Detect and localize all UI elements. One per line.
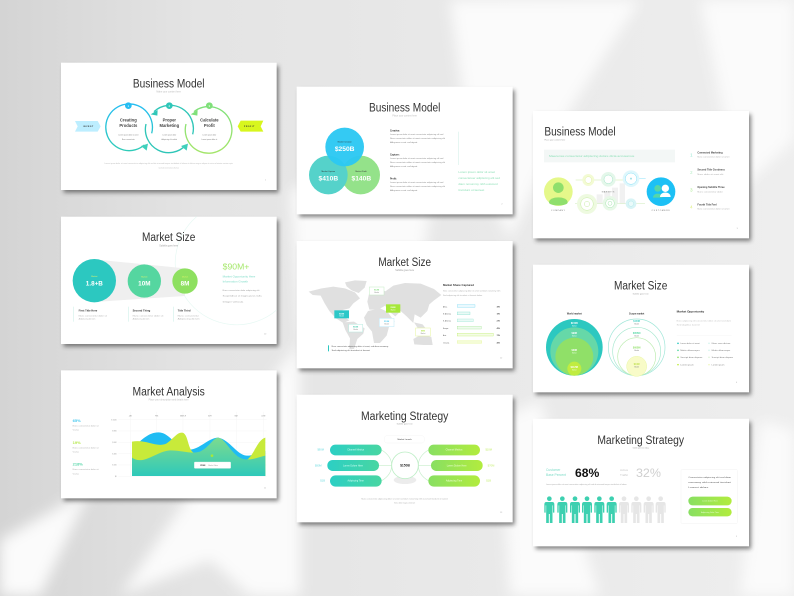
share heading: Market Share Captured xyxy=(443,283,474,287)
tooltip xyxy=(194,462,231,468)
title: Market Analysis xyxy=(132,384,205,398)
stats: Vivamus xyxy=(73,452,79,454)
circle one: 1.8+B xyxy=(86,280,103,287)
tag: profit xyxy=(238,121,263,132)
ring two: 2 xyxy=(168,104,170,108)
venn diagram: Market Profit xyxy=(355,170,367,173)
share bars: 72% xyxy=(497,335,501,337)
chart: world market: $90B xyxy=(572,333,577,335)
panel: Business Model venn: 2 xyxy=(501,203,502,205)
text block: profit: Nunc consectetur dolor sit amet consectetur adipiscing elit xyxy=(390,185,446,188)
map tag: africa: $10M xyxy=(384,321,389,323)
chart: scope market: Market xyxy=(634,322,640,325)
area chart xyxy=(111,412,267,478)
right values xyxy=(485,448,494,483)
stats: Vivamus xyxy=(73,430,79,432)
share bars: N. America xyxy=(443,313,451,316)
stats: 19% xyxy=(73,440,81,445)
ring three xyxy=(185,102,232,153)
title: Market Size xyxy=(142,230,196,244)
ring three: 3 xyxy=(208,104,210,108)
area chart: $ 60K xyxy=(112,442,118,444)
venn diagram xyxy=(309,128,380,194)
share bars: Oceania xyxy=(443,342,449,344)
opportunity legend: Suscipit diam aliquam xyxy=(680,356,703,359)
column two: Adipiscing dictum xyxy=(133,318,150,321)
right values: $10M xyxy=(485,448,492,452)
text block: creative: Aliquam erat volutpat xyxy=(390,141,418,144)
column one xyxy=(73,307,108,322)
panel: Marketing Strategy pills: 13 xyxy=(500,512,503,514)
chart: scope market: $150B xyxy=(633,321,640,323)
centre circle xyxy=(392,452,418,484)
stats: Nunc consectetur dolor sit xyxy=(73,424,99,427)
panel: Marketing Strategy pictogram xyxy=(533,419,751,549)
chart: world market: Market xyxy=(572,369,577,372)
card: Laoreet dolore xyxy=(688,486,708,489)
column three xyxy=(173,307,201,322)
stats: 218% xyxy=(73,462,83,467)
circle captions: CUSTOMERS xyxy=(652,210,670,212)
column three: Nunc consectetur xyxy=(178,314,200,317)
title: Business Model xyxy=(544,125,616,139)
icon: customer person xyxy=(647,177,675,206)
panel: Business Model process circles: 1 xyxy=(265,179,266,181)
title: Business Model xyxy=(133,76,204,90)
chart: world market: $30B xyxy=(572,350,577,352)
left values xyxy=(315,448,325,483)
share bars xyxy=(443,305,501,344)
share heading xyxy=(443,283,500,297)
chart: world market: Market xyxy=(572,352,577,355)
stat: $90M+ xyxy=(223,262,249,272)
map tag: asia xyxy=(386,304,400,313)
chart: scope market: Market xyxy=(634,335,640,338)
panel: Business Model customer flow: MARKETS xyxy=(602,190,615,193)
step captions: Nunc consectetur xyxy=(122,138,135,141)
card: Consectetur adipiscing elit sed diam xyxy=(688,476,732,479)
share bars: Africa xyxy=(443,305,447,308)
step captions: Lorem ipsum dolor sit xyxy=(201,138,218,141)
venn diagram: Market Capture xyxy=(321,170,336,173)
top pill: Market Launch xyxy=(398,438,413,441)
chart: scope market: $60BM xyxy=(633,347,640,349)
panel: Business Model customer flow: 3 xyxy=(737,228,739,230)
stat: Suspendisse ut magna purus nulla xyxy=(223,295,262,298)
numbered list: Nunc consectetur dolor sit amet xyxy=(697,156,730,159)
text block: capture xyxy=(390,154,446,168)
stat: customer percent: Customer xyxy=(546,468,561,472)
opportunity text xyxy=(677,309,732,327)
title: Market Size xyxy=(614,279,668,293)
title: Marketing Strategy xyxy=(361,409,448,423)
venn diagram: $140B xyxy=(352,175,371,182)
chart: scope market: $85BM xyxy=(633,333,640,335)
tag: profit: PROFIT xyxy=(244,126,255,128)
left pills xyxy=(327,445,382,487)
numbered list: Nunc dolor sit amet elit xyxy=(697,173,724,176)
map tag: oceania: Market xyxy=(421,332,426,335)
text block: profit: Aliquam erat volutpat xyxy=(390,189,418,192)
right pills: Adipiscing Time xyxy=(446,480,463,483)
right pills xyxy=(428,445,483,487)
numbered list: Opening Subtitle Three xyxy=(697,186,725,189)
step captions xyxy=(118,134,218,141)
map tag: oceania xyxy=(416,328,430,336)
text block: profit: Lorem ipsum dolor sit amet consectetur adipiscing elit sed xyxy=(390,181,443,184)
numbered list: 2 xyxy=(690,170,693,175)
map tag: north america: Market xyxy=(339,315,345,318)
stat xyxy=(223,262,262,303)
text block: capture: Capture: xyxy=(390,154,400,157)
opportunity text: Market Opportunity xyxy=(677,309,705,313)
column two xyxy=(128,307,164,322)
panel: Market Size nested circles: 4 xyxy=(736,382,738,384)
text block: capture: Aliquam erat volutpat xyxy=(390,165,418,168)
title: Market Size xyxy=(378,255,431,269)
area chart: JAN xyxy=(129,415,133,418)
chart: world market xyxy=(546,313,603,376)
numbered list: Fourth Title Feel xyxy=(697,203,717,206)
share heading: Nunc consectetur adipiscing dolor sit amet sed diam nonummy nibh xyxy=(443,290,500,293)
area chart: MARCH xyxy=(180,415,187,418)
panel: Marketing Strategy pills xyxy=(297,395,515,525)
map tag: europe: $12M xyxy=(374,290,379,292)
panel: Marketing Strategy pictogram: Subtitle goes here today xyxy=(633,446,649,449)
column two: Second Thing xyxy=(133,308,151,312)
pictogram: people xyxy=(544,496,666,523)
column three: Title Third xyxy=(178,308,191,312)
column three: Adipiscing dictum xyxy=(178,318,201,321)
footer text: Nunc dolor magna sit dictum xyxy=(394,502,416,505)
step captions: Lorem ipsum dolor xyxy=(162,135,177,137)
step captions: Lorem ipsum dolor xyxy=(202,135,217,137)
ring one xyxy=(106,102,152,151)
left pills: Channel Metrics xyxy=(347,449,365,452)
panel: Marketing Strategy pictogram: Lorem ipsum dolor sit amet consectetur adipiscing elit sed do eiusmod tempor incididunt ut labore xyxy=(546,483,627,486)
opportunity legend xyxy=(677,342,734,366)
footer text xyxy=(361,498,449,505)
chart: scope market: $10M xyxy=(634,364,640,366)
numbered list: Nunc consectetur dolor xyxy=(697,190,724,193)
faint ring xyxy=(175,217,277,325)
area chart: $ 80K xyxy=(112,431,118,433)
stat: Integer vehicula xyxy=(223,300,243,303)
connector arcs xyxy=(379,450,431,481)
area chart: $0 xyxy=(115,476,117,478)
step labels: Products xyxy=(119,123,138,128)
map tag: europe xyxy=(369,287,384,295)
map tag: oceania: $8M xyxy=(421,331,425,333)
faint bars xyxy=(597,183,625,203)
right pills: Channel Metrics xyxy=(446,449,463,452)
panel: Business Model process circles xyxy=(61,63,279,193)
flow lines xyxy=(575,178,646,204)
area chart: $ 20K xyxy=(112,465,118,467)
numbered list xyxy=(690,151,730,211)
step labels: Marketing xyxy=(160,123,180,128)
text block: creative: Creative: xyxy=(390,130,400,133)
left values: $80M xyxy=(315,463,322,467)
step labels: Proper xyxy=(163,117,176,122)
circle captions: COMPANY xyxy=(551,209,566,212)
opportunity legend: Lorem dolor sit amet xyxy=(680,342,700,345)
chart: world market: World market xyxy=(567,313,582,316)
column two: Nunc consectetur dolor sit xyxy=(133,314,164,317)
venn diagram: $250B xyxy=(335,146,355,153)
share heading: Sed adipiscing elit tincidunt ut laoreet dolore xyxy=(443,294,482,297)
share bars: Asia xyxy=(443,334,446,337)
world map xyxy=(309,280,441,349)
panel: Business Model venn: Place your content here xyxy=(392,114,418,117)
stat: Information Growth xyxy=(223,279,248,283)
stats xyxy=(73,418,99,475)
circle captions xyxy=(551,209,670,212)
green callout: diam nonummy nibh euismod xyxy=(458,183,498,186)
circle one xyxy=(73,259,116,302)
map tag: south america: $15M xyxy=(353,327,358,329)
left values: $1B xyxy=(320,479,325,483)
opportunity legend: Nunc sem dictum xyxy=(712,342,731,345)
ring two xyxy=(145,102,193,153)
stat: Market Opportunity Here xyxy=(223,274,256,278)
text block: capture: Lorem ipsum dolor sit amet consectetur adipiscing elit sed xyxy=(390,157,443,160)
share bars: 18% xyxy=(497,314,501,316)
panel: Market Size nested circles xyxy=(533,265,751,395)
share bars: 23% xyxy=(497,321,501,323)
chart: world market: Market xyxy=(572,324,577,327)
area chart: APR xyxy=(208,415,213,418)
panel: Market Size world map: Subtitle goes here xyxy=(395,269,415,272)
node row xyxy=(577,170,639,214)
stats: 65% xyxy=(73,418,81,423)
share bars: S. America xyxy=(443,320,451,323)
area chart: $ 100K xyxy=(111,419,118,421)
title: Marketing Strategy xyxy=(597,433,684,447)
card: nonummy nibh euismod tincidunt xyxy=(688,481,732,484)
right values: $70M xyxy=(488,463,494,467)
opportunity legend: Mattis ullamcorper xyxy=(680,349,700,352)
circle two xyxy=(128,264,161,298)
stats: Vivamus xyxy=(73,473,79,475)
stat: customer percent xyxy=(546,466,600,480)
text block: profit xyxy=(390,177,446,192)
numbered list: Connected Marketing xyxy=(697,151,723,154)
area chart: JUNE xyxy=(261,416,266,418)
step labels: Calculate xyxy=(200,117,219,122)
panel: Marketing Strategy pictogram: 5 xyxy=(736,536,738,538)
map tag: south america: Market xyxy=(353,328,359,331)
opportunity legend: Lorem ipsum xyxy=(712,363,725,366)
step labels: Profit xyxy=(204,123,215,128)
tooltip: $15M xyxy=(200,465,206,467)
chart: scope market: Scope market xyxy=(629,313,645,316)
circle two: 10M xyxy=(138,280,150,287)
panel: Business Model process circles: Make your content here xyxy=(156,90,182,93)
map tag: north america: $50M xyxy=(339,313,344,315)
funnel band xyxy=(94,259,185,302)
title: Business Model xyxy=(369,100,440,114)
stats: Nunc consectetur dolor sit xyxy=(73,446,99,449)
numbered list: 3 xyxy=(690,188,693,193)
column one: Adipiscing dictum xyxy=(79,318,96,321)
numbered list: 4 xyxy=(690,205,693,210)
area chart: MAY xyxy=(235,415,239,418)
footer text: nostrud exercitation ullamco xyxy=(158,166,179,169)
highlight box: Maecenas consectetur adipiscing dolore dicta accusamus xyxy=(549,154,635,158)
text block: creative: Lorem ipsum dolor sit amet consectetur adipiscing elit sed xyxy=(390,133,443,136)
left pills: Adipiscing Time xyxy=(348,480,365,483)
tag: invest xyxy=(75,121,101,132)
share bars: 45% xyxy=(497,341,501,344)
icon: company person xyxy=(544,177,573,206)
chart: scope market: Market xyxy=(634,366,640,369)
step labels xyxy=(119,117,219,128)
panel: Market Size nested circles: Subtitle goes here xyxy=(633,293,650,296)
opportunity legend: Lorem ipsum xyxy=(680,363,695,366)
opportunity text: Sed dapibus laoreet xyxy=(677,324,701,327)
card xyxy=(681,469,737,524)
map tag: europe: Market xyxy=(374,291,380,294)
map tag: asia: Market xyxy=(391,308,396,311)
share bars: 45% xyxy=(497,327,501,330)
panel: Market Size circles: Subtitle goes here xyxy=(159,244,179,247)
area chart: FEB xyxy=(155,416,159,418)
numbered list: 1 xyxy=(690,153,693,158)
panel: Business Model customer flow: Place your content here xyxy=(544,139,566,142)
chart: scope market: Market xyxy=(634,349,640,352)
right values: $1B xyxy=(486,479,491,483)
chart: world market: $150B xyxy=(571,323,578,325)
text block: profit: Profit: xyxy=(390,177,397,180)
footer text: Nunc consectetur adipiscing dolor sit amet sed diam nonummy nibh euismod tincidunt ut laoreet xyxy=(361,498,449,501)
text block: capture: Nunc consectetur dolor sit amet consectetur adipiscing elit xyxy=(390,161,446,164)
stat: traffic percent: 32% xyxy=(636,466,661,480)
stat: customer percent: 68% xyxy=(575,466,600,480)
column one: Nunc consectetur dolor sit xyxy=(79,314,108,317)
opportunity text: Nunc adipiscing elit consectetur dolor sit amet sed diam xyxy=(677,319,732,322)
panel: Marketing Strategy pills: Subtitle goes here xyxy=(397,422,414,425)
right pills: Lorem Dolore Here xyxy=(447,464,467,467)
map caption: Nunc consectetur adipiscing dolor sit amet, sed diam nonummy xyxy=(332,345,389,348)
map tag: south america xyxy=(349,324,363,332)
opportunity legend: Mattis ullamcorper xyxy=(712,349,731,352)
left pills: Lorem Dolore Here xyxy=(343,464,364,467)
map caption xyxy=(328,345,389,352)
tooltip: Market Value xyxy=(208,464,218,467)
centre circle: $150B xyxy=(400,464,410,468)
ring one: 1 xyxy=(127,104,129,108)
circle two: Market xyxy=(141,276,148,279)
panel: Business Model venn xyxy=(297,87,515,217)
panel: Market Size circles xyxy=(61,217,279,347)
green callout: consectetuer adipiscing elit sed xyxy=(458,177,501,180)
text block: creative xyxy=(390,130,446,144)
highlight box xyxy=(544,150,675,162)
green callout: tincidunt ut laoreet xyxy=(458,189,485,192)
area chart: $ 40K xyxy=(112,453,118,455)
map tag: africa xyxy=(379,318,394,327)
stat: traffic percent xyxy=(620,466,661,480)
chart: world market: Market xyxy=(572,334,577,337)
numbered list: Nunc consectetur dolor sit amet xyxy=(697,208,730,211)
stat: customer percent: Base Percent xyxy=(546,473,566,477)
stats: Nunc consectetur dolor sit xyxy=(73,468,99,471)
panel: Market Analysis area chart: Place your description and details here xyxy=(149,398,189,401)
green callout: Lorem ipsum dolor sit amet xyxy=(458,171,495,174)
map tag: north america xyxy=(334,310,349,318)
stat: traffic percent: Active xyxy=(620,468,628,472)
share bars: 38% xyxy=(497,306,501,308)
panel: Business Model customer flow xyxy=(533,111,751,241)
step labels: Creating xyxy=(120,117,137,122)
text block: creative: Nunc consectetur dolor sit amet consectetur adipiscing elit xyxy=(390,137,446,140)
card: Lorem Dolore Here xyxy=(702,501,718,503)
map tag: asia: $30M xyxy=(391,307,396,309)
venn diagram: $410B xyxy=(319,175,338,182)
tag: invest: INVEST xyxy=(83,126,94,128)
venn diagram: Market Creation xyxy=(338,140,352,143)
numbered list: Second Title Goodness xyxy=(697,169,726,172)
stat: Nunc consectetur dolor adipiscing elit xyxy=(223,289,260,292)
map caption: Sed adipiscing elit tincidunt ut laoreet xyxy=(332,349,371,352)
panel: Market Analysis area chart xyxy=(61,370,279,501)
step captions: Lorem ipsum dolor sit amet xyxy=(118,134,139,137)
card: Adipiscing Dolor Time xyxy=(701,511,719,514)
share bars: Europe xyxy=(443,328,448,330)
step captions: Adipiscing elit sed do xyxy=(162,138,177,141)
chart: scope market xyxy=(608,313,665,376)
circle three: Market xyxy=(182,276,188,279)
circle three: 8M xyxy=(181,280,189,287)
left values: $90M xyxy=(317,448,324,452)
top pill xyxy=(384,436,424,443)
panel: Market Size world map: 12 xyxy=(500,358,502,360)
stat: traffic percent: Traffic xyxy=(620,473,629,477)
green callout xyxy=(458,171,501,192)
panel: Market Analysis area chart: 11 xyxy=(264,488,266,490)
footer text xyxy=(104,162,233,169)
panel: Market Size world map xyxy=(297,241,515,371)
footer text: Lorem ipsum dolor sit amet consectetur adipiscing elit sed do eiusmod tempor incididunt ut labore et dolore magna aliqua ut enim ad minim veniam quis xyxy=(104,162,233,165)
opportunity legend: Suscipit diam aliquam xyxy=(712,356,734,359)
map tag: africa: Market xyxy=(384,322,390,325)
chart: world market: $10.5B xyxy=(571,367,578,369)
panel: Market Size circles: 10 xyxy=(264,333,267,335)
circle one: Market xyxy=(91,275,98,278)
circle three xyxy=(172,268,198,294)
column one: First Title Here xyxy=(79,308,98,312)
